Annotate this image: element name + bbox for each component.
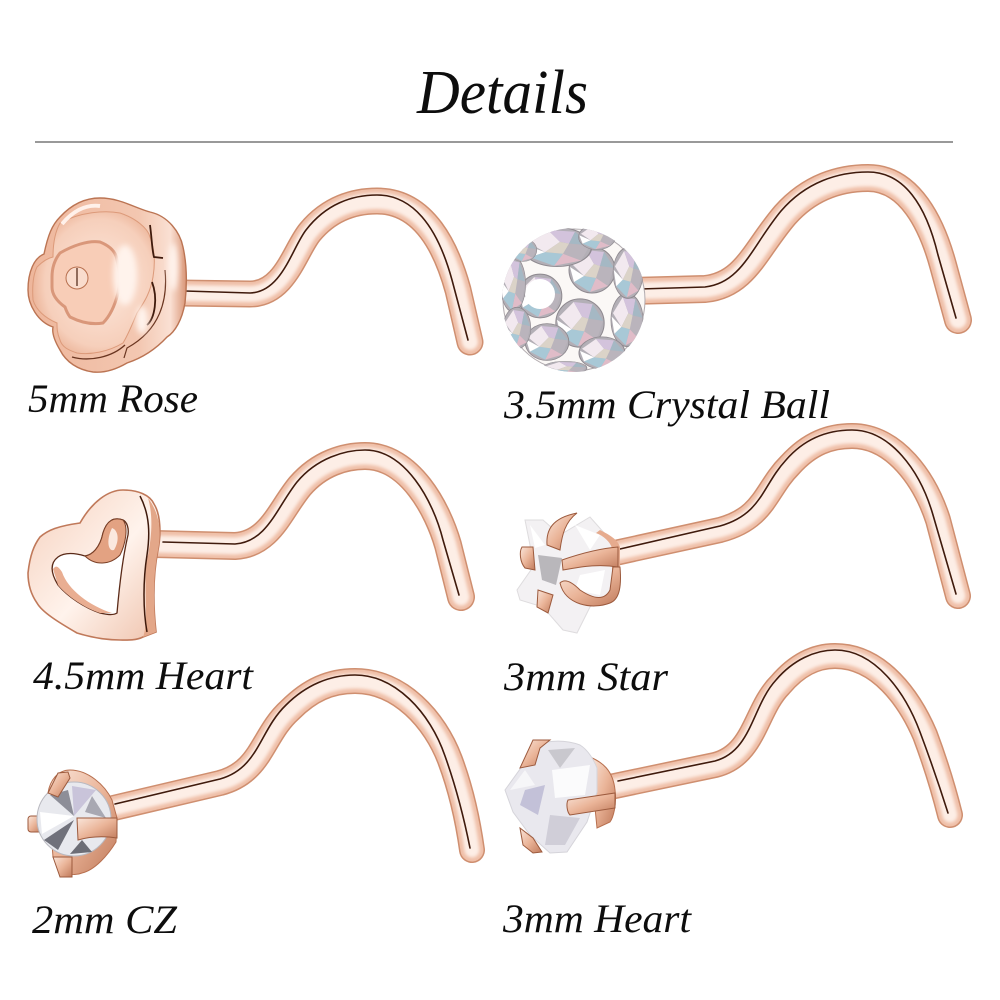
screw wire — [610, 650, 950, 815]
icon: round CZ gem — [28, 770, 117, 877]
title: Details — [416, 59, 588, 127]
screw wire — [630, 172, 958, 320]
icon: crystal ball — [500, 224, 645, 375]
icon: rose head — [28, 198, 186, 372]
item: 5mm rose screw — [28, 195, 470, 372]
label: 3.5mm Crystal Ball: 3.5mm Crystal Ball — [503, 382, 830, 427]
item: 4.5mm heart screw — [28, 450, 461, 640]
item: 3mm star screw — [517, 430, 958, 633]
label: 3mm Star: 3mm Star — [503, 654, 668, 699]
icon: heart gem — [505, 740, 616, 853]
item: 3.5mm crystal ball screw — [500, 172, 958, 375]
screw wire — [180, 195, 470, 342]
icon: open heart — [28, 490, 160, 640]
item: 3mm heart screw — [505, 650, 950, 853]
screw wire — [105, 675, 472, 850]
icon: star gem — [517, 513, 621, 633]
label: 3mm Heart: 3mm Heart — [502, 896, 692, 941]
screw wire — [615, 430, 958, 596]
label: 2mm CZ: 2mm CZ — [32, 897, 178, 942]
label: 4.5mm Heart: 4.5mm Heart — [33, 653, 254, 698]
item: 2mm CZ screw — [28, 675, 472, 877]
label: 5mm Rose: 5mm Rose — [28, 376, 198, 421]
screw wire — [155, 450, 461, 597]
